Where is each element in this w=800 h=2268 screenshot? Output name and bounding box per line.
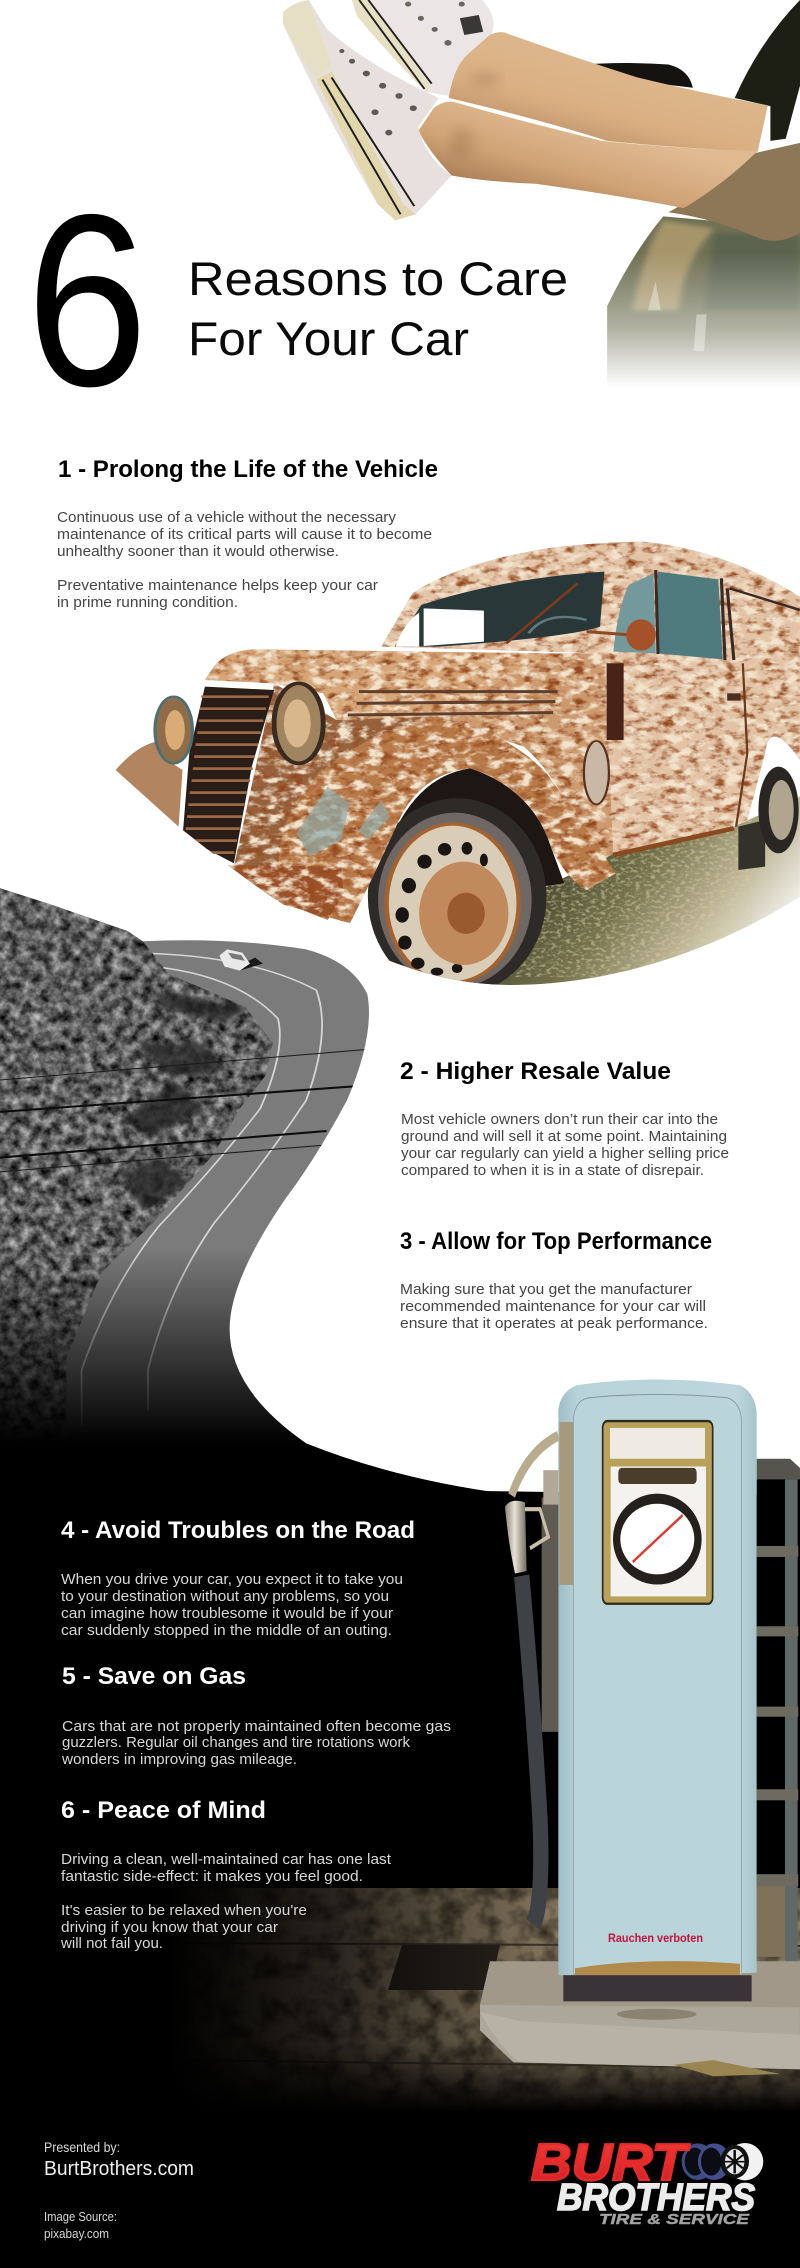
body 3: recommended maintenance for your car will bbox=[400, 1299, 706, 1315]
body 6: driving if you know that your car bbox=[61, 1920, 278, 1936]
door pillar bbox=[430, 653, 613, 867]
body 1: in prime running condition. bbox=[57, 595, 238, 611]
road surface bbox=[0, 888, 486, 1491]
body 3: Making sure that you get the manufacturer bbox=[400, 1282, 692, 1298]
hood bbox=[205, 649, 585, 720]
body 4: can imagine how troublesome it would be if your bbox=[61, 1606, 393, 1622]
body 6: fantastic side-effect: it makes you feel good. bbox=[61, 1869, 363, 1885]
van cabin bbox=[381, 542, 800, 853]
footer credits: BurtBrothers.com bbox=[44, 2158, 194, 2180]
body 4 bbox=[61, 1572, 403, 1639]
front fender bbox=[279, 717, 616, 923]
big number 6: 6 bbox=[26, 163, 148, 437]
upper leg bbox=[449, 32, 768, 152]
logo: Burt Brothers Tire & Service: TIRE & SERVICE bbox=[599, 2211, 750, 2228]
rear wheel bbox=[738, 767, 799, 870]
body 1: unhealthy sooner than it would otherwise. bbox=[57, 544, 339, 560]
wheel well bbox=[386, 768, 564, 887]
left fender and headlight bbox=[116, 697, 192, 833]
body 5: Cars that are not properly maintained often become gas bbox=[62, 1719, 451, 1735]
hood louvres bbox=[348, 692, 558, 715]
reason 1 bbox=[57, 456, 438, 611]
body 2: compared to when it is in a state of disrepair. bbox=[401, 1163, 704, 1179]
lane markings bbox=[82, 968, 280, 1427]
side mirror bbox=[571, 63, 693, 88]
reason 3 bbox=[400, 1228, 712, 1332]
pump outer body bbox=[558, 1380, 757, 1975]
footer credits: pixabay.com bbox=[44, 2226, 109, 2241]
bumper bbox=[221, 865, 343, 920]
ladder rack behind pump bbox=[757, 1459, 800, 1971]
reason 4 bbox=[61, 1517, 415, 1639]
nozzle bbox=[505, 1501, 548, 1573]
title: Reasons to Care bbox=[188, 252, 568, 305]
body 4: car suddenly stopped in the middle of an outing. bbox=[61, 1623, 392, 1639]
body 6: will not fail you. bbox=[60, 1936, 163, 1952]
door details bbox=[584, 663, 747, 855]
car window frame bbox=[735, 0, 800, 141]
body 4: to your destination without any problems, so you bbox=[61, 1589, 389, 1605]
heading 3: 3 - Allow for Top Performance bbox=[400, 1228, 712, 1255]
rock hillside bbox=[0, 888, 273, 1426]
body 5: wonders in improving gas mileage. bbox=[61, 1752, 297, 1768]
body 2 bbox=[401, 1112, 729, 1179]
pump front panel bbox=[573, 1394, 742, 1975]
front wheel bbox=[368, 798, 546, 995]
heading 5: 5 - Save on Gas bbox=[62, 1663, 246, 1690]
pump base bbox=[563, 1975, 752, 2001]
body 1: maintenance of its critical parts will cause it to become bbox=[57, 527, 432, 543]
hose bbox=[522, 1576, 541, 1925]
body 4: When you drive your car, you expect it to take you bbox=[61, 1572, 403, 1588]
body 5 bbox=[61, 1719, 451, 1768]
vintage gas pump bbox=[480, 1380, 800, 2076]
upper sneaker bbox=[352, 0, 494, 96]
rust strip bbox=[575, 1961, 740, 1975]
black lower background bbox=[0, 1475, 800, 2268]
car door fading to white bbox=[605, 216, 800, 390]
photo: legs out of car window bbox=[283, 0, 800, 390]
footer credits bbox=[44, 2139, 194, 2241]
lit concrete floor bbox=[170, 1885, 800, 2115]
body 1 bbox=[57, 510, 432, 611]
logo tires bbox=[682, 2143, 763, 2180]
grille bbox=[183, 687, 274, 863]
body 6: Driving a clean, well-maintained car has one last bbox=[61, 1852, 391, 1868]
footer credits: Presented by: bbox=[44, 2139, 120, 2155]
footer credits: Image Source: bbox=[44, 2209, 117, 2224]
body 1: Continuous use of a vehicle without the necessary bbox=[57, 510, 397, 526]
side windows bbox=[613, 570, 800, 660]
heading 1: 1 - Prolong the Life of the Vehicle bbox=[58, 456, 438, 483]
reason 5 bbox=[61, 1663, 451, 1768]
body 5: guzzlers. Regular oil changes and tire rotations work bbox=[62, 1735, 411, 1751]
blue paint patch bbox=[296, 787, 390, 857]
heading 4: 4 - Avoid Troubles on the Road bbox=[61, 1517, 415, 1544]
reason 2 bbox=[400, 1058, 729, 1179]
title bbox=[188, 252, 568, 365]
pump label: Rauchen verboten bbox=[608, 1933, 703, 1945]
grey side panel bbox=[542, 1498, 558, 1732]
khaki shirt bbox=[668, 143, 800, 241]
body 1: Preventative maintenance helps keep your car bbox=[57, 578, 378, 594]
rust texture bbox=[205, 542, 800, 925]
photo: rusty vintage van in circular crop bbox=[116, 542, 800, 995]
body 2: Most vehicle owners don’t run their car into the bbox=[401, 1112, 718, 1128]
power lines bbox=[0, 1086, 357, 1158]
lower leg bbox=[418, 102, 758, 208]
heading 6: 6 - Peace of Mind bbox=[61, 1797, 266, 1824]
grass ground bbox=[457, 797, 800, 987]
body 6 bbox=[60, 1852, 391, 1952]
gauge window bbox=[603, 1421, 713, 1604]
body 2: ground and will sell it at some point. Maintaining bbox=[401, 1129, 727, 1145]
reason 6 bbox=[60, 1797, 391, 1952]
front apron bbox=[234, 683, 430, 867]
small white car bbox=[219, 949, 263, 971]
lower sneaker bbox=[283, 0, 452, 220]
body 3 bbox=[400, 1282, 708, 1332]
right headlight bbox=[274, 683, 323, 763]
windshield bbox=[395, 572, 604, 647]
fade to black bbox=[0, 1247, 510, 1520]
fuel pipe and holder bbox=[512, 1436, 558, 1505]
body 3: ensure that it operates at peak performance. bbox=[400, 1316, 708, 1332]
title: For Your Car bbox=[188, 312, 469, 365]
logo: Burt Brothers Tire & Service: BROTHERS bbox=[557, 2177, 755, 2219]
logo: Burt Brothers Tire & Service: BURT bbox=[531, 2134, 691, 2192]
tan side strip bbox=[559, 1422, 573, 1585]
logo: Burt Brothers Tire & Service bbox=[531, 2134, 763, 2228]
concrete plinth bbox=[480, 1961, 800, 2076]
knee shadows bbox=[451, 71, 500, 159]
body 6: It's easier to be relaxed when you're bbox=[61, 1903, 307, 1919]
body 2: your car regularly can yield a higher selling price bbox=[401, 1146, 729, 1162]
photo: winding mountain road in black and white bbox=[0, 880, 510, 1520]
wing mirror bbox=[587, 619, 656, 651]
heading 2: 2 - Higher Resale Value bbox=[400, 1058, 671, 1085]
